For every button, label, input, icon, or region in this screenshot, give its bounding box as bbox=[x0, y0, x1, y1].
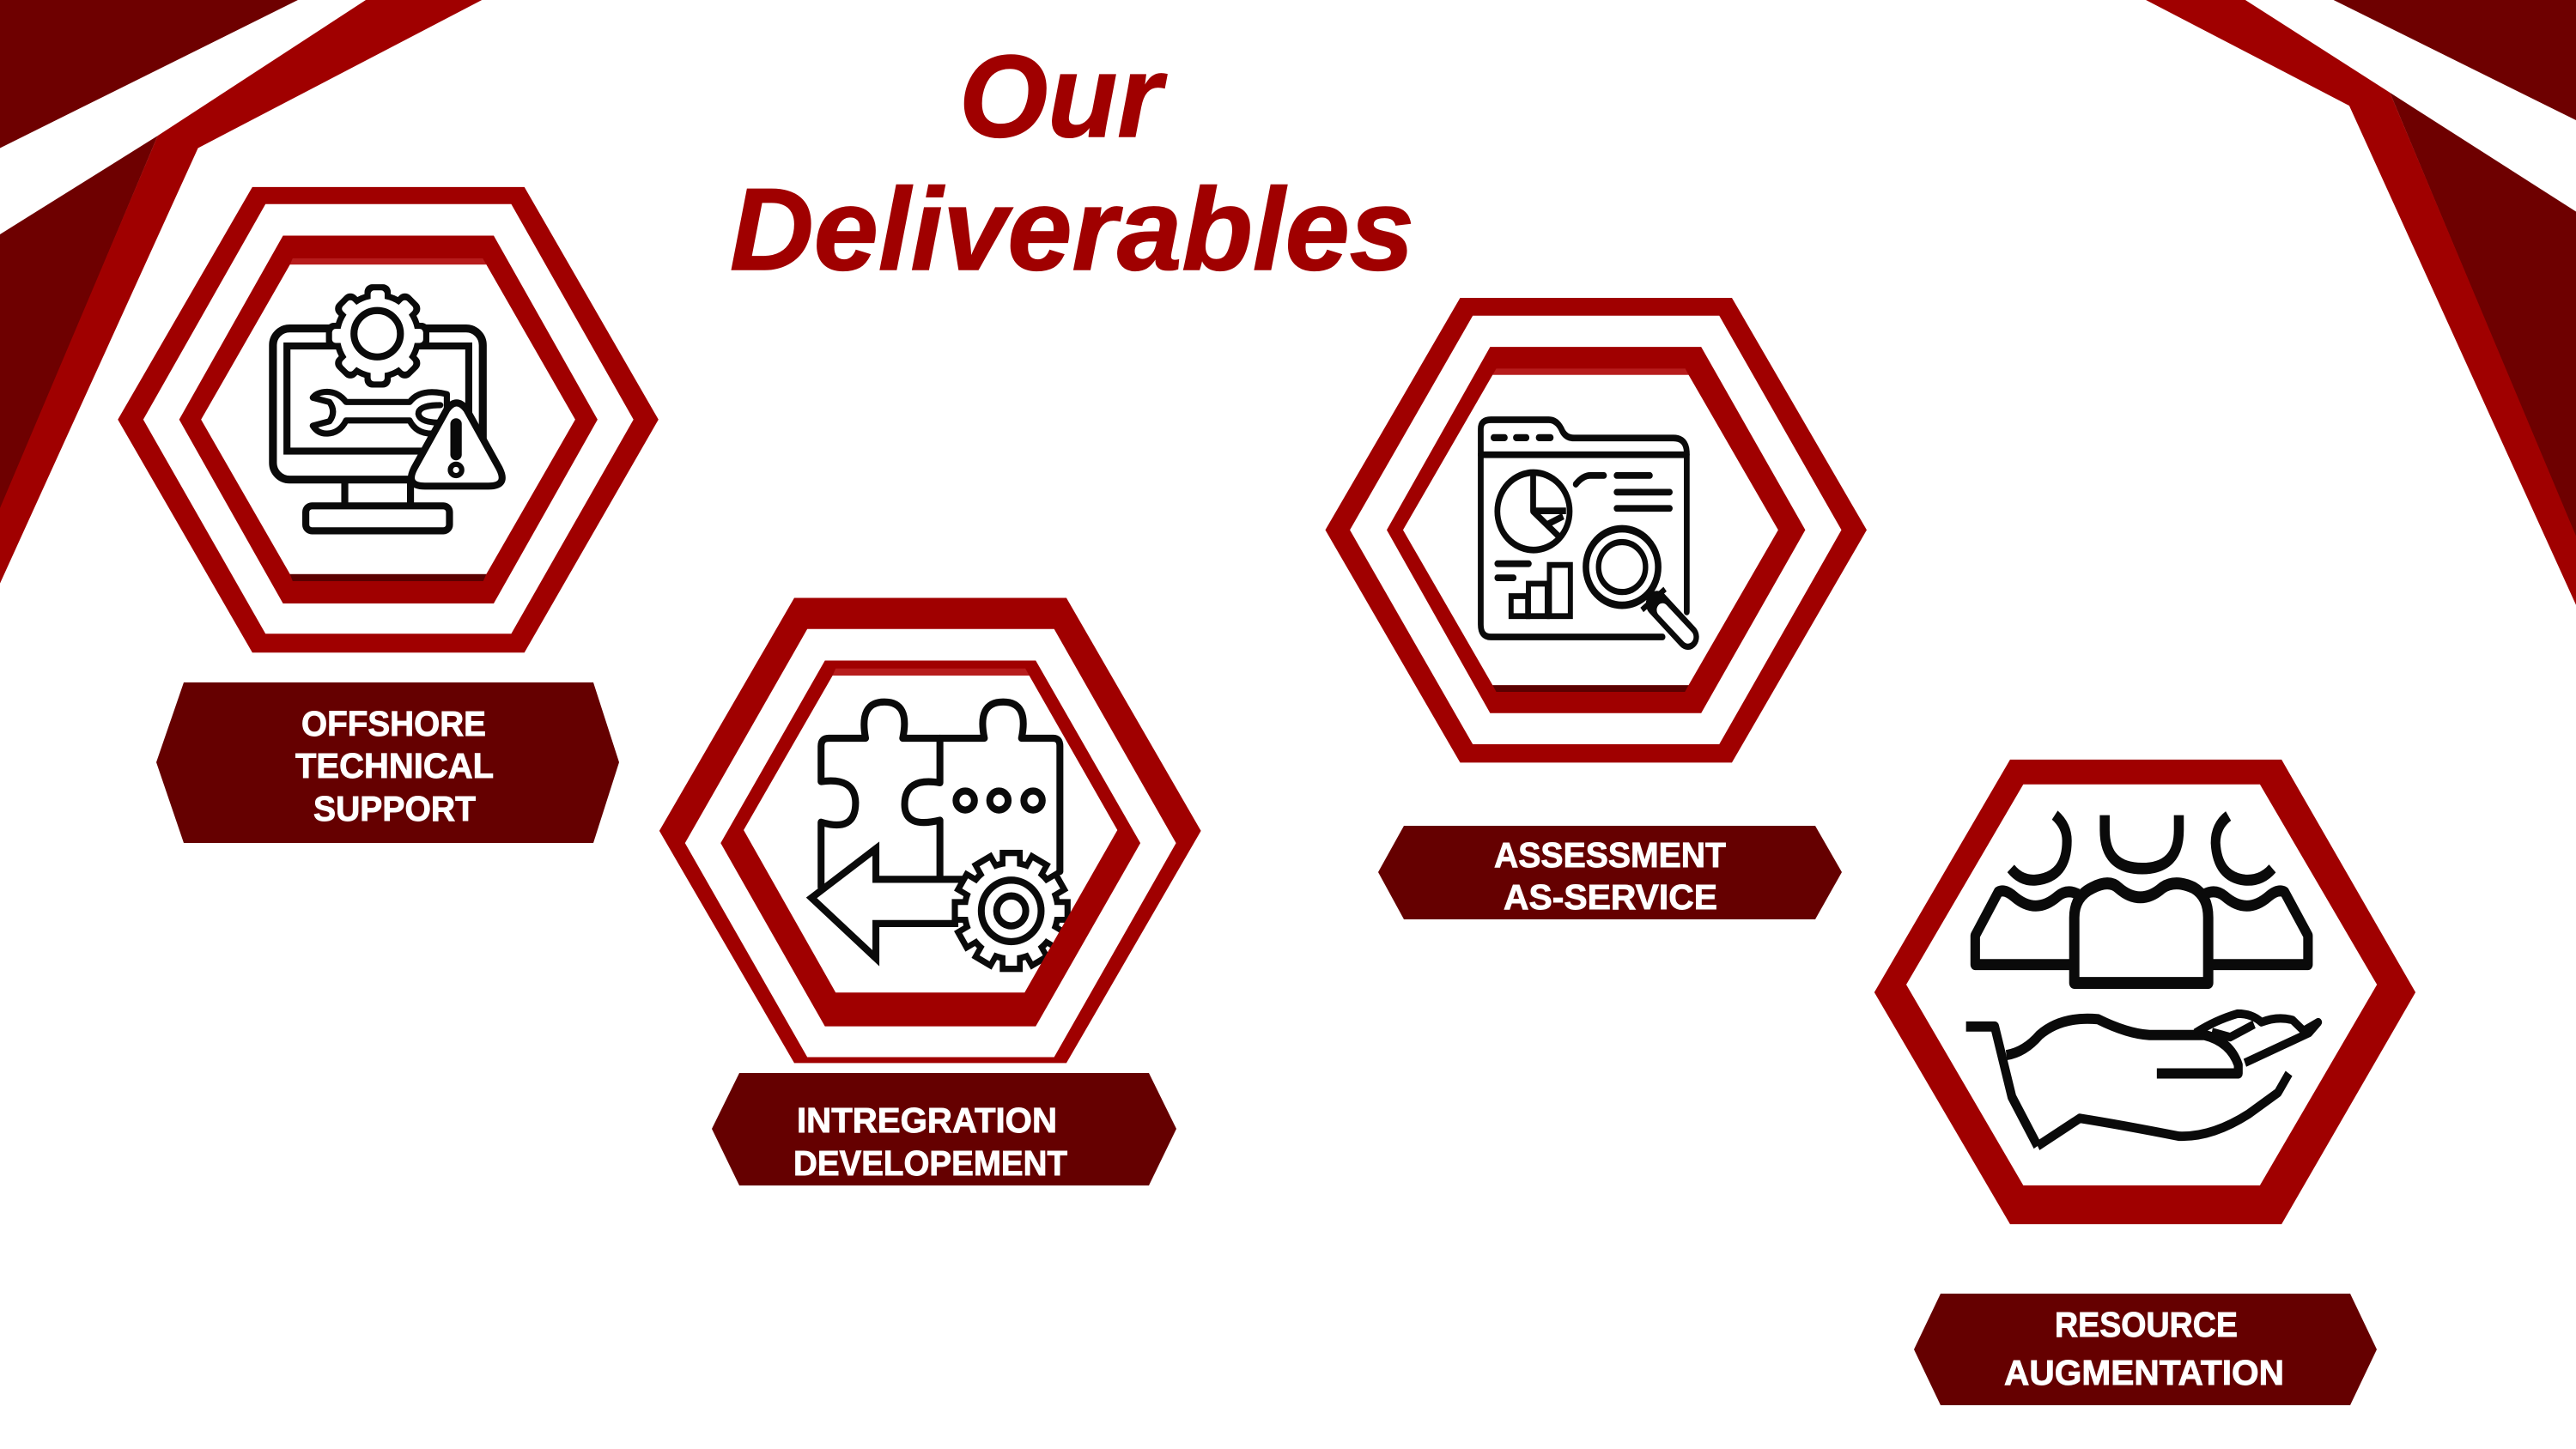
hexagon with report icon bbox=[1325, 298, 1867, 762]
title bbox=[730, 31, 1414, 294]
hexagon outer ring bbox=[1325, 298, 1867, 762]
title: Our bbox=[959, 31, 1168, 161]
hexagon ring bbox=[1874, 760, 2415, 1224]
icon: team of people above open hand bbox=[1966, 815, 2318, 1146]
panel: integration development bbox=[659, 598, 1201, 1185]
icon: monitor with gear, wrench and warning bbox=[273, 284, 502, 530]
label: resource augmentation bbox=[1914, 1294, 2377, 1405]
top-left corner decoration bbox=[0, 0, 482, 584]
panel: assessment as-service bbox=[1325, 298, 1867, 919]
icon: browser window with charts and magnifier bbox=[1480, 420, 1688, 637]
hexagon inner ring bbox=[1387, 347, 1805, 713]
label: offshore technical support: OFFSHORE bbox=[301, 704, 486, 743]
hexagon with monitor icon bbox=[118, 187, 659, 652]
label: integration development: INTREGRATION bbox=[797, 1100, 1057, 1140]
label: integration development: DEVELOPEMENT bbox=[793, 1143, 1067, 1183]
icon: puzzle pieces, arrow and gear bbox=[811, 702, 1071, 972]
hexagon outer ring bbox=[118, 187, 659, 652]
hexagon inner ring bbox=[179, 235, 598, 603]
label: offshore technical support bbox=[156, 682, 619, 843]
hexagon with team in hand icon bbox=[1874, 760, 2415, 1224]
label: assessment as-service: ASSESSMENT bbox=[1494, 835, 1726, 875]
hexagon inner ring bbox=[720, 661, 1140, 1027]
title: Deliverables bbox=[730, 164, 1414, 294]
label: resource augmentation: RESOURCE bbox=[2055, 1305, 2238, 1344]
panel: resource augmentation bbox=[1874, 760, 2415, 1405]
label: assessment as-service bbox=[1378, 826, 1842, 919]
label: integration development bbox=[712, 1073, 1176, 1185]
hexagon outer ring bbox=[659, 598, 1201, 1063]
hexagon with puzzle icon bbox=[659, 598, 1201, 1063]
label: assessment as-service: AS-SERVICE bbox=[1504, 877, 1717, 917]
panel: offshore technical support bbox=[118, 187, 659, 843]
label: resource augmentation: AUGMENTATION bbox=[2004, 1353, 2284, 1392]
top-right corner decoration bbox=[2146, 0, 2576, 605]
label: offshore technical support: SUPPORT bbox=[313, 789, 476, 828]
label: offshore technical support: TECHNICAL bbox=[295, 746, 494, 785]
